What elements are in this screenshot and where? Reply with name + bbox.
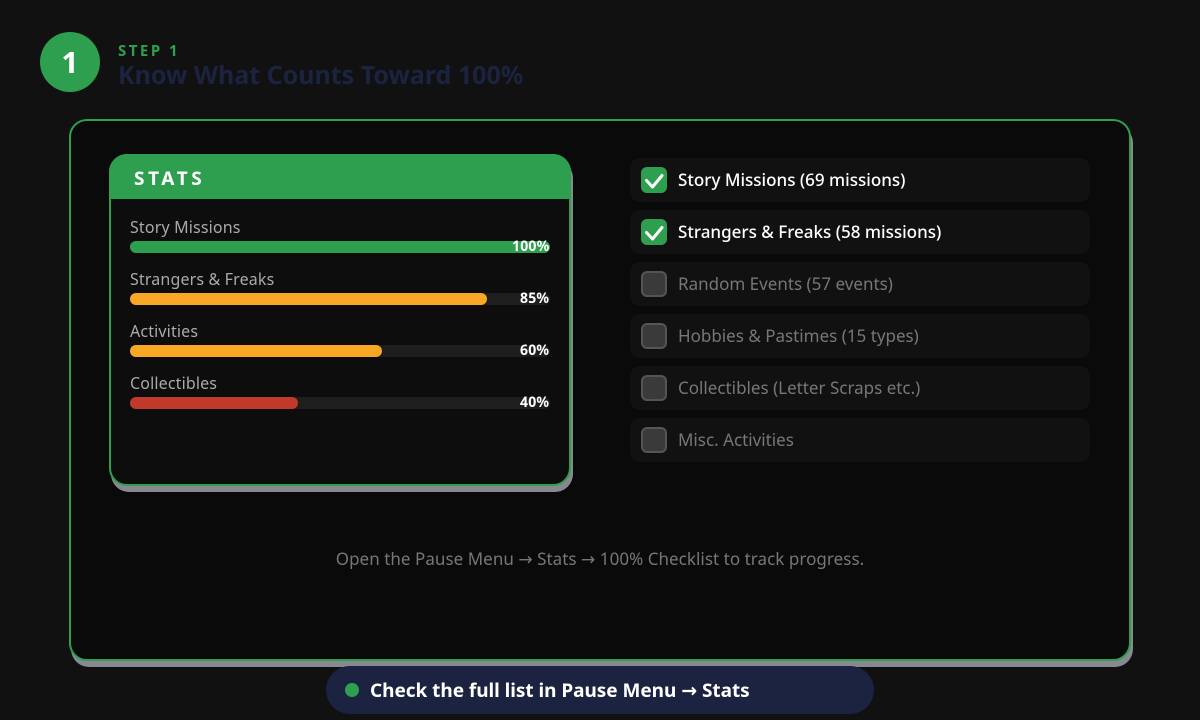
- heading: Know What Counts Toward 100%: [118, 58, 523, 92]
- stats header: [109, 154, 571, 199]
- panel: stats card: [109, 154, 571, 486]
- stat label: collectibles: Collectibles: [130, 372, 217, 394]
- value: collectibles: 40%: [520, 393, 549, 412]
- checklist item: collectibles: [630, 366, 1090, 410]
- progress bar: story missions: [130, 241, 550, 253]
- stat label: activities: Activities: [130, 320, 198, 342]
- progress bar: collectibles: [130, 397, 550, 409]
- callout dot: [345, 683, 359, 697]
- step label: STEP 1: [118, 41, 180, 61]
- checklist item: random events: Random Events (57 events): [678, 272, 893, 295]
- callout text: Check the full list in Pause Menu → Stats: [370, 677, 750, 703]
- checklist item: story missions: [630, 158, 1090, 202]
- value: strangers and freaks: 85%: [520, 289, 549, 308]
- checklist item: misc activities: [630, 418, 1090, 462]
- step number badge: 1: [61, 41, 79, 82]
- stat label: strangers and freaks: Strangers & Freaks: [130, 268, 274, 290]
- value: story missions: 100%: [512, 237, 549, 256]
- step number badge: [40, 32, 100, 92]
- stat label: story missions: Story Missions: [130, 216, 241, 238]
- checklist item: hobbies and pastimes: Hobbies & Pastimes (15 types): [678, 324, 919, 347]
- checklist item: misc activities: Misc. Activities: [678, 428, 794, 451]
- note: Open the Pause Menu → Stats → 100% Checklist to track progress.: [336, 547, 864, 570]
- checklist item: story missions: Story Missions (69 missions): [678, 168, 905, 191]
- checklist item: collectibles: Collectibles (Letter Scraps etc.): [678, 376, 920, 399]
- stats header: STATS: [134, 165, 205, 191]
- checklist item: random events: [630, 262, 1090, 306]
- callout pill: [326, 666, 874, 714]
- progress bar: strangers and freaks: [130, 293, 550, 305]
- progress bar: activities: [130, 345, 550, 357]
- checklist item: hobbies and pastimes: [630, 314, 1090, 358]
- checklist item: strangers and freaks: [630, 210, 1090, 254]
- value: activities: 60%: [520, 341, 549, 360]
- checklist item: strangers and freaks: Strangers & Freaks (58 missions): [678, 220, 941, 243]
- panel: main checklist: [69, 119, 1131, 661]
